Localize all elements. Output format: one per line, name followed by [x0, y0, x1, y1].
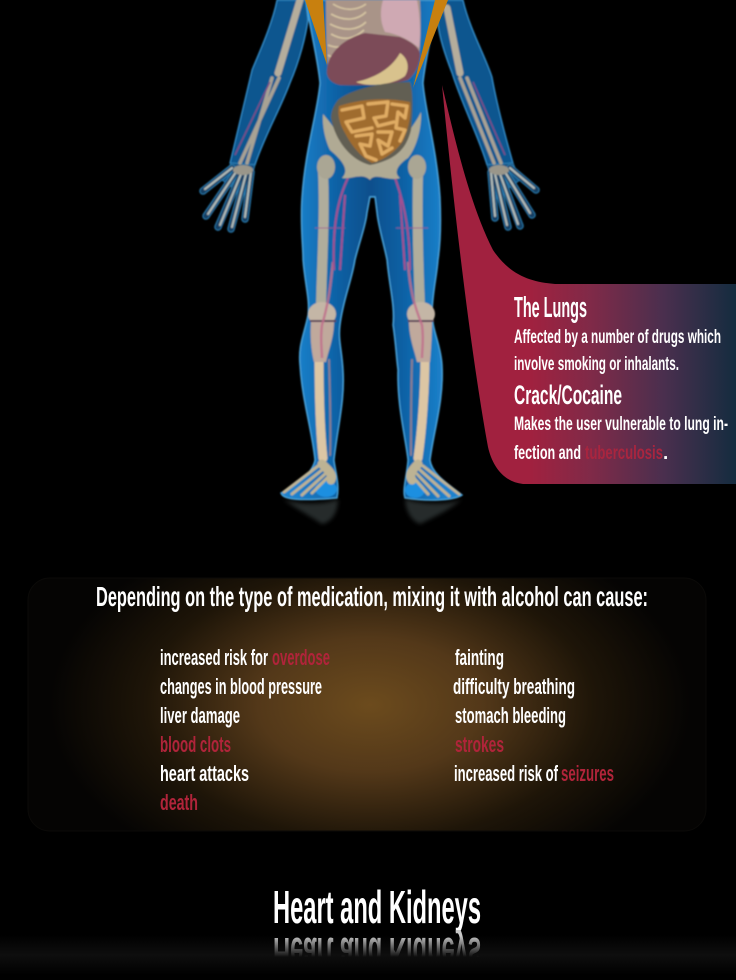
intestine base — [338, 99, 411, 163]
crack description: tuberculosis — [585, 443, 663, 464]
chest cavity — [326, 0, 421, 70]
ribs — [328, 4, 366, 57]
left effects list: liver damage — [160, 703, 240, 728]
foot reflections — [283, 499, 462, 524]
callout: the lungs — [442, 85, 736, 484]
left effects list: overdose — [272, 645, 330, 670]
floor band — [0, 935, 736, 975]
hip joints — [317, 155, 426, 179]
callout shape — [442, 85, 736, 484]
left effects list: death — [160, 790, 198, 815]
stomach — [356, 53, 408, 85]
crack description — [514, 414, 728, 464]
right hand — [487, 163, 536, 227]
right effects list: seizures — [561, 761, 614, 786]
liver — [327, 33, 420, 85]
crack description: . — [663, 443, 668, 464]
left effects list — [160, 645, 330, 815]
small intestine — [338, 99, 411, 163]
right effects list: increased risk of — [454, 761, 558, 786]
blue heels — [315, 481, 425, 498]
left arm skin — [230, 0, 308, 165]
left effects list: heart attacks — [160, 761, 249, 786]
thigh vessels — [315, 170, 428, 270]
crack description: fection and — [514, 443, 581, 464]
left effects list: increased risk for — [160, 645, 268, 670]
left effects list: blood clots — [160, 732, 231, 757]
right effects list: stomach bleeding — [455, 703, 566, 728]
panel: alcohol mixing — [28, 578, 706, 831]
arm vessels — [235, 82, 505, 155]
knees — [308, 302, 435, 362]
right effects list: fainting — [455, 645, 504, 670]
arm bones — [240, 0, 501, 163]
torso and legs skin — [281, 0, 462, 500]
right lung — [381, 0, 420, 48]
heading reflection: Heart and Kidneys — [273, 928, 481, 980]
lungs description — [514, 327, 721, 375]
knee vessels — [321, 262, 423, 358]
right arm skin — [438, 0, 513, 165]
anatomy figure — [203, 0, 536, 500]
left effects list: changes in blood pressure — [160, 674, 322, 699]
orange pointer: left — [305, 0, 327, 65]
leg bones — [319, 172, 425, 458]
right effects list: difficulty breathing — [453, 674, 575, 699]
feet bones — [284, 464, 459, 496]
section heading: heart and kidneys: Heart and Kidneys — [273, 881, 481, 933]
panel background — [28, 578, 706, 831]
right effects list — [453, 645, 614, 786]
orange pointer: right — [413, 0, 448, 88]
pelvis — [323, 112, 421, 180]
right effects list: strokes — [455, 732, 504, 757]
heading: crack/cocaine: Crack/Cocaine — [514, 380, 622, 410]
colon — [331, 82, 412, 165]
callout: the lungs: The Lungs — [514, 292, 587, 324]
intestine loops — [342, 102, 407, 160]
left hand — [203, 163, 255, 229]
